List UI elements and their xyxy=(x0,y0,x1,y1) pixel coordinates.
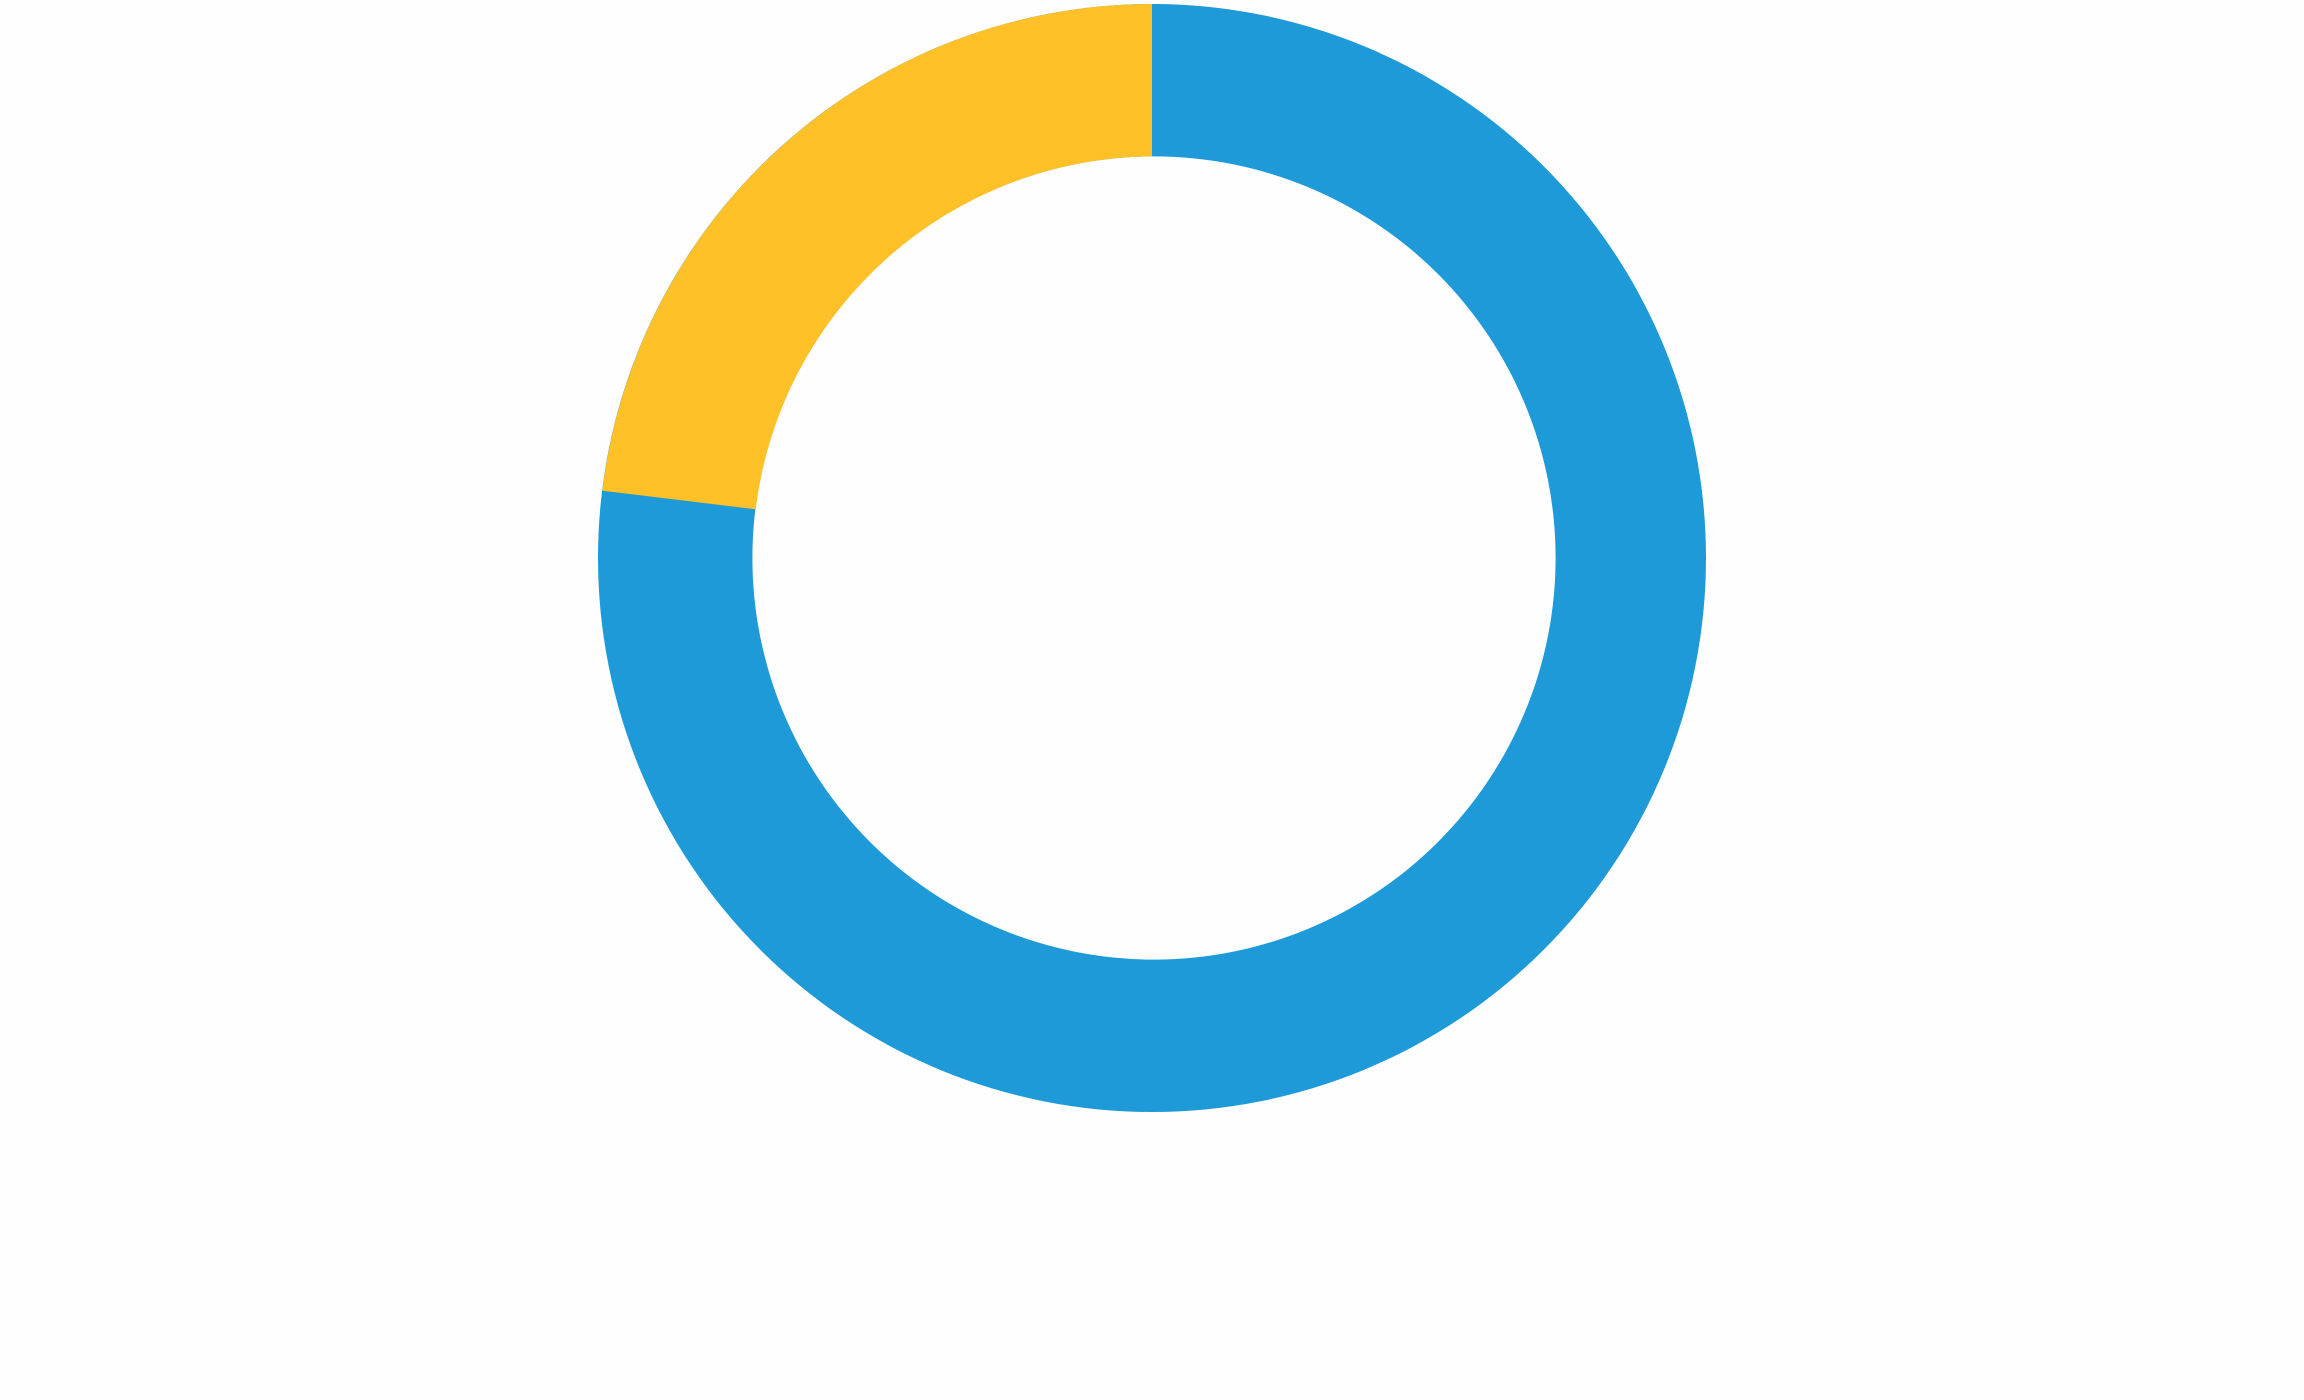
segment: yellow minority arc xyxy=(602,4,1152,509)
segment: blue majority ring xyxy=(598,4,1706,1112)
